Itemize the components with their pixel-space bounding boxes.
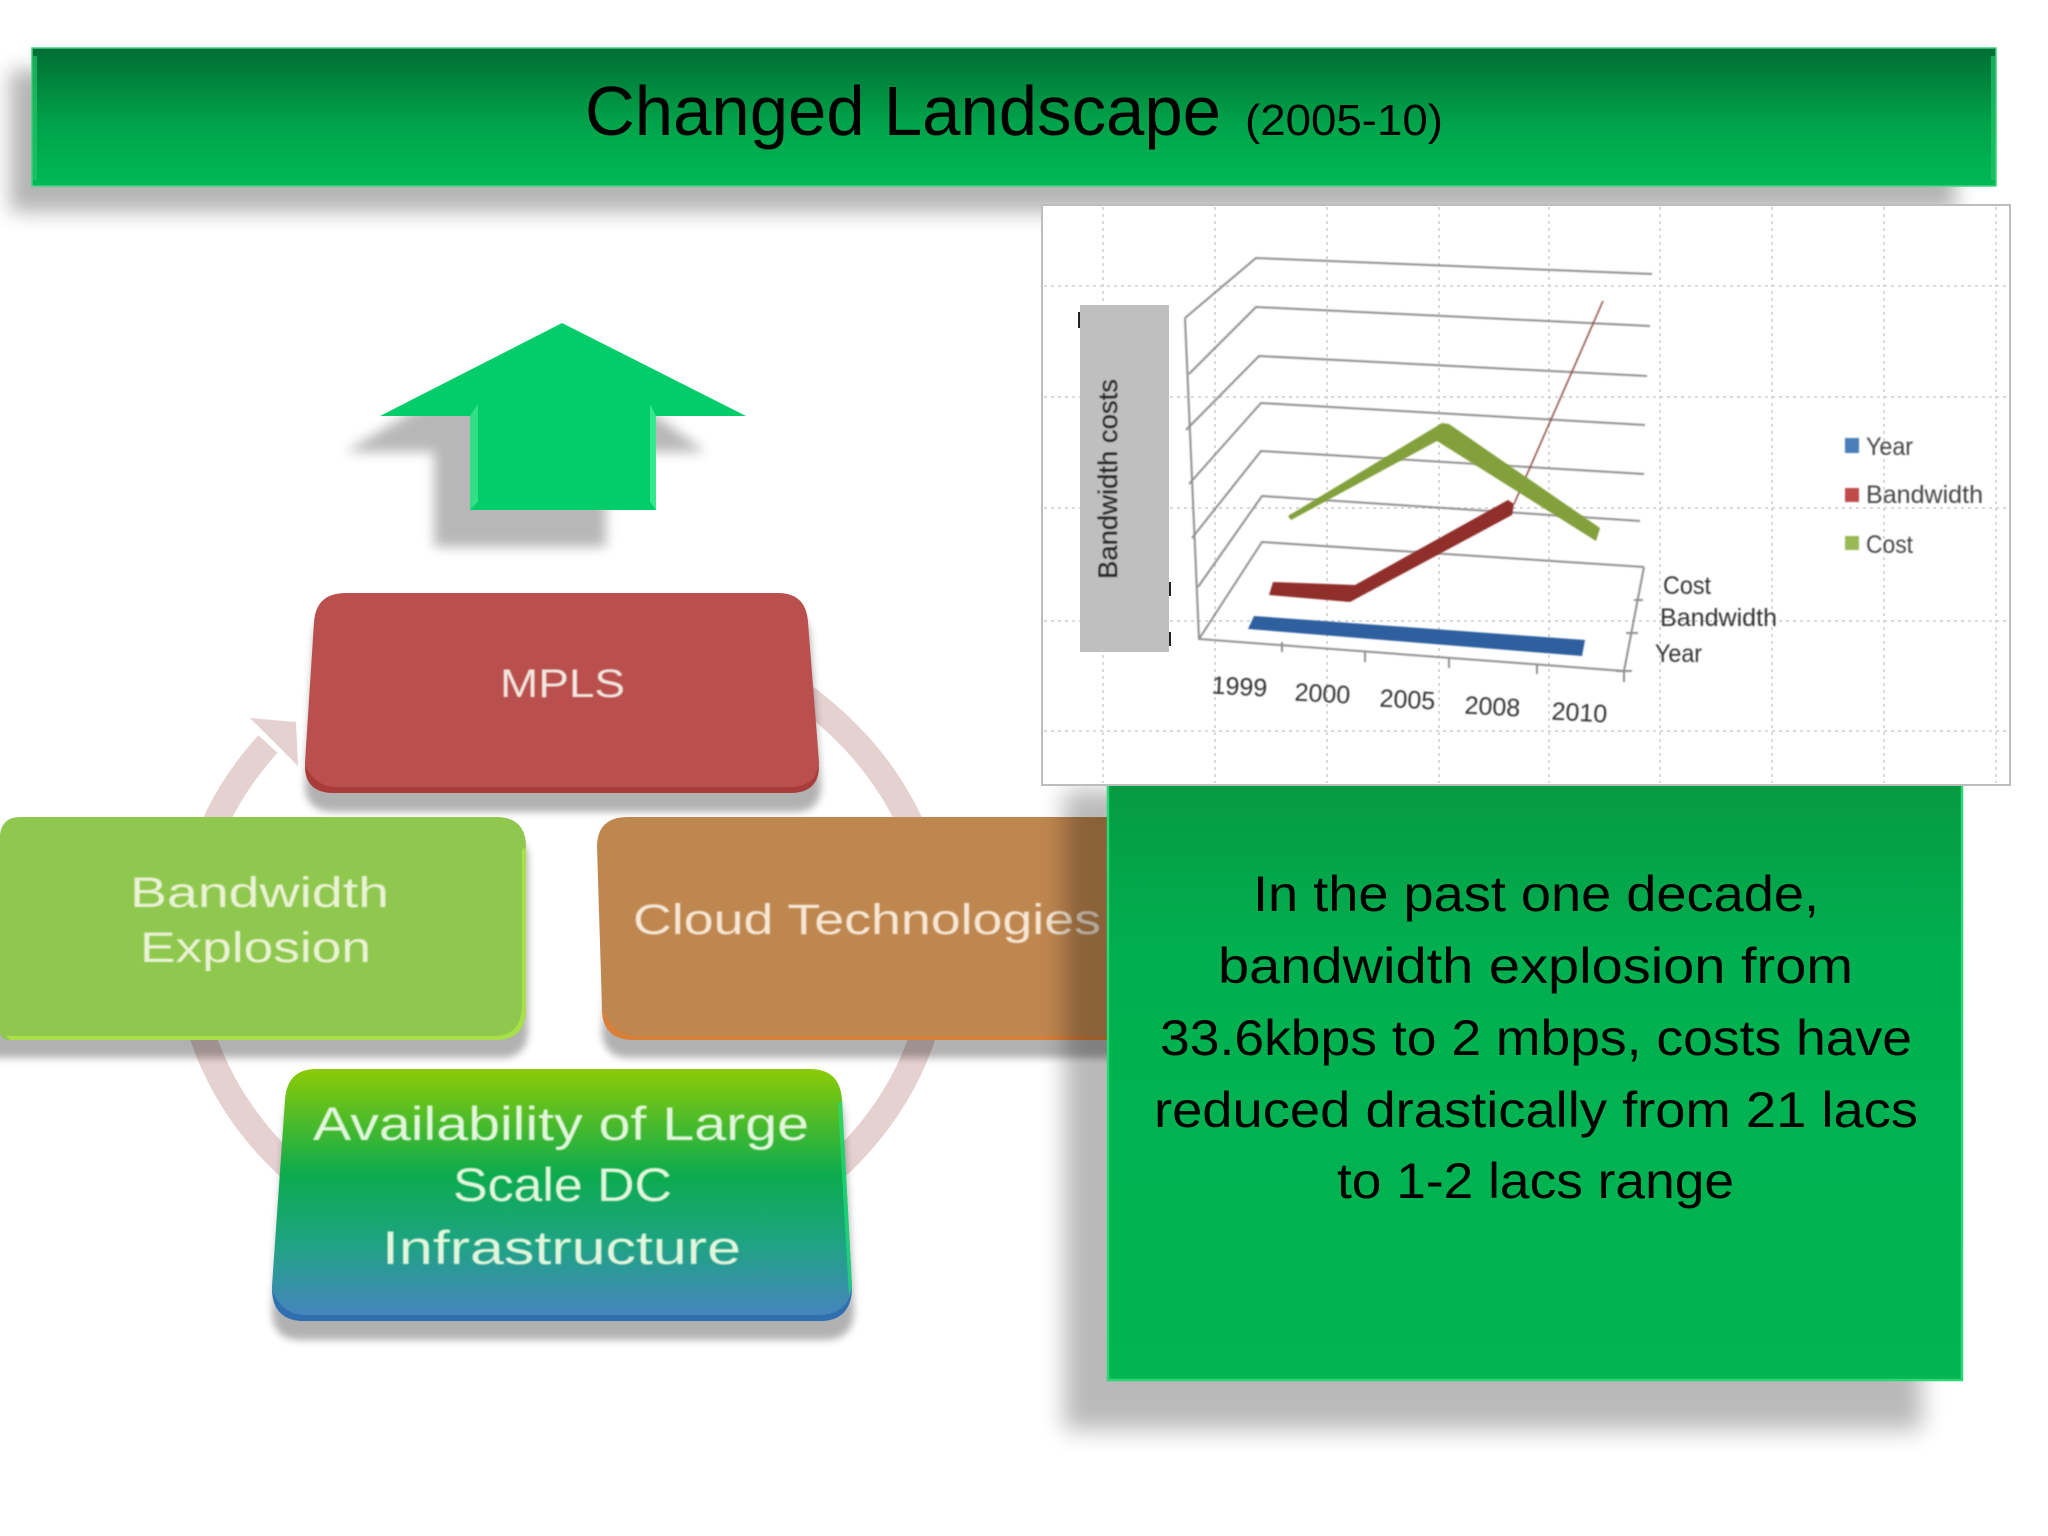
explanation text: 33.6kbps to 2 mbps, costs have <box>1160 1010 1912 1066</box>
chart x-axis labels: 2000 <box>1294 679 1351 709</box>
icon: up arrow <box>345 323 746 547</box>
panel: Availability of Large Scale DC Infrastructure <box>272 1069 854 1340</box>
explanation text: reduced drastically from 21 lacs <box>1154 1082 1918 1138</box>
series: Year <box>1248 616 1585 656</box>
chart x-axis labels: 1999 <box>1211 672 1268 702</box>
cycle ring with arrow <box>188 620 938 1270</box>
chart x-axis labels: 2010 <box>1551 698 1608 728</box>
panel: Cloud Technologies <box>597 817 1120 1058</box>
chart depth-axis labels: Bandwidth <box>1660 604 1777 632</box>
series: Cost <box>1288 423 1600 541</box>
explanation text <box>1154 866 1918 1209</box>
chart legend: Cost <box>1866 531 1913 559</box>
ring arrowhead <box>250 718 298 766</box>
label: Bandwidth Explosion: Bandwidth <box>130 869 389 917</box>
label: Bandwidth Explosion <box>130 869 389 972</box>
explanation text: bandwidth explosion from <box>1218 938 1853 994</box>
title text: (2005-10) <box>1245 96 1443 145</box>
label: Availability of Large Scale DC Infrastructure: Scale DC <box>453 1158 672 1211</box>
panel: Bandwidth Explosion <box>0 817 528 1058</box>
label: Availability of Large Scale DC Infrastructure: Availability of Large <box>313 1097 809 1150</box>
chart x-axis labels: 2005 <box>1379 685 1436 715</box>
chart x-axis labels: 2008 <box>1464 692 1521 722</box>
title text: Changed Landscape <box>585 72 1221 150</box>
title banner <box>10 48 1996 212</box>
explanation text: In the past one decade, <box>1253 866 1819 922</box>
chart 3D grid <box>1185 258 1652 682</box>
panel: explanation text box <box>1064 780 1962 1430</box>
explanation text: to 1-2 lacs range <box>1337 1153 1734 1209</box>
label: MPLS: MPLS <box>500 662 625 706</box>
chart x-axis labels <box>1211 672 1608 728</box>
chart depth-axis labels: Year <box>1655 640 1702 668</box>
chart axis title: Bandwidth costs <box>1093 379 1123 579</box>
chart: bandwidth and cost line chart <box>1042 205 2010 785</box>
chart legend: Year <box>1866 433 1913 461</box>
chart axis title <box>1079 305 1170 652</box>
chart legend <box>1845 433 1983 559</box>
chart depth-axis labels <box>1655 572 1777 668</box>
series: Bandwidth <box>1269 301 1603 602</box>
panel: MPLS <box>305 593 821 812</box>
label: Availability of Large Scale DC Infrastructure: Infrastructure <box>382 1221 741 1274</box>
chart depth-axis labels: Cost <box>1663 572 1711 600</box>
chart legend: Bandwidth <box>1866 481 1983 509</box>
label: Availability of Large Scale DC Infrastructure <box>313 1097 809 1274</box>
label: Bandwidth Explosion: Explosion <box>140 924 371 972</box>
label: Cloud Technologies: Cloud Technologies <box>633 896 1101 944</box>
